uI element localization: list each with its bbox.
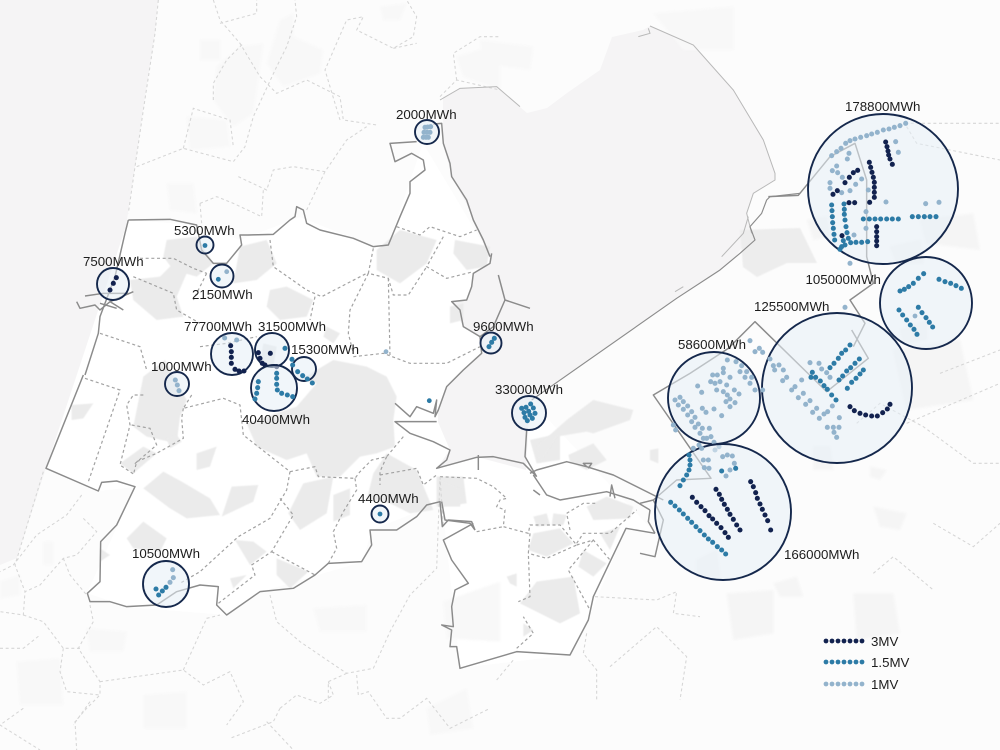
sea on the west [0,0,158,565]
site: 9600MWh [473,319,534,354]
site: 178800MWh: 178800MWh [845,99,920,114]
site: 4400MWh [358,491,419,522]
legend item: 1MV: 1MV [871,677,898,692]
site: 7500MWh [83,254,144,300]
site: 10500MWh [132,546,200,607]
site: 1000MWh: 1000MWh [151,359,212,374]
site: 77700MWh: 77700MWh [184,319,252,334]
urban grey patches polder and east [440,400,658,637]
site: 2150MWh: 2150MWh [192,287,253,302]
eastern dashed borders [857,123,1000,590]
legend [824,634,910,692]
urban grey patches south [72,403,350,588]
faint patches east [697,213,980,640]
legend item: 1.5MV: 1.5MV [871,655,910,670]
site: 2000MWh [396,107,457,144]
site: 31500MWh: 31500MWh [258,319,326,334]
site: 4400MWh: 4400MWh [358,491,419,506]
province outline south [46,375,475,615]
inner land area [46,143,655,668]
western administrative dashed borders [100,0,500,370]
site: 105000MWh [806,257,972,349]
site: 58600MWh [668,337,760,453]
central administrative dashed borders [0,378,490,750]
site: 9600MWh: 9600MWh [473,319,534,334]
site: 166000MWh: 166000MWh [784,547,859,562]
site: 10500MWh: 10500MWh [132,546,200,561]
southern polder outline [442,455,663,668]
site: 77700MWh [184,319,253,375]
site: 1000MWh [151,359,212,396]
faint patches south [0,542,500,735]
site: 33000MWh [495,382,563,430]
IJmuiden harbour lines [77,292,133,310]
eastern urban patch [740,228,817,277]
eastern province outline [640,143,873,557]
site: 5300MWh: 5300MWh [174,223,235,238]
site: 125500MWh [747,299,912,463]
IJsselmeer water [437,26,775,470]
site: 33000MWh: 33000MWh [495,382,563,397]
site: 15300MWh [289,342,359,386]
urban grey patches central [120,230,560,530]
site: 7500MWh: 7500MWh [83,254,144,269]
site: 2000MWh: 2000MWh [396,107,457,122]
site: 15300MWh: 15300MWh [291,342,359,357]
site: 58600MWh: 58600MWh [678,337,746,352]
isolated turbine dots [384,349,432,403]
Markermeer coast [395,253,537,477]
site: 2150MWh [192,264,253,302]
site: 125500MWh: 125500MWh [754,299,829,314]
faint patches north [167,3,733,213]
site: 40400MWh [242,365,310,427]
southern administrative dashed borders [440,477,700,700]
province outline north [85,123,490,375]
site: 166000MWh [655,442,859,580]
site: 5300MWh [174,223,235,254]
site: 105000MWh: 105000MWh [806,272,881,287]
site: 178800MWh [808,99,958,310]
site: 31500MWh [255,319,326,369]
site: 40400MWh: 40400MWh [242,412,310,427]
dike lines [440,26,800,400]
legend item: 3MV: 3MV [871,634,898,649]
